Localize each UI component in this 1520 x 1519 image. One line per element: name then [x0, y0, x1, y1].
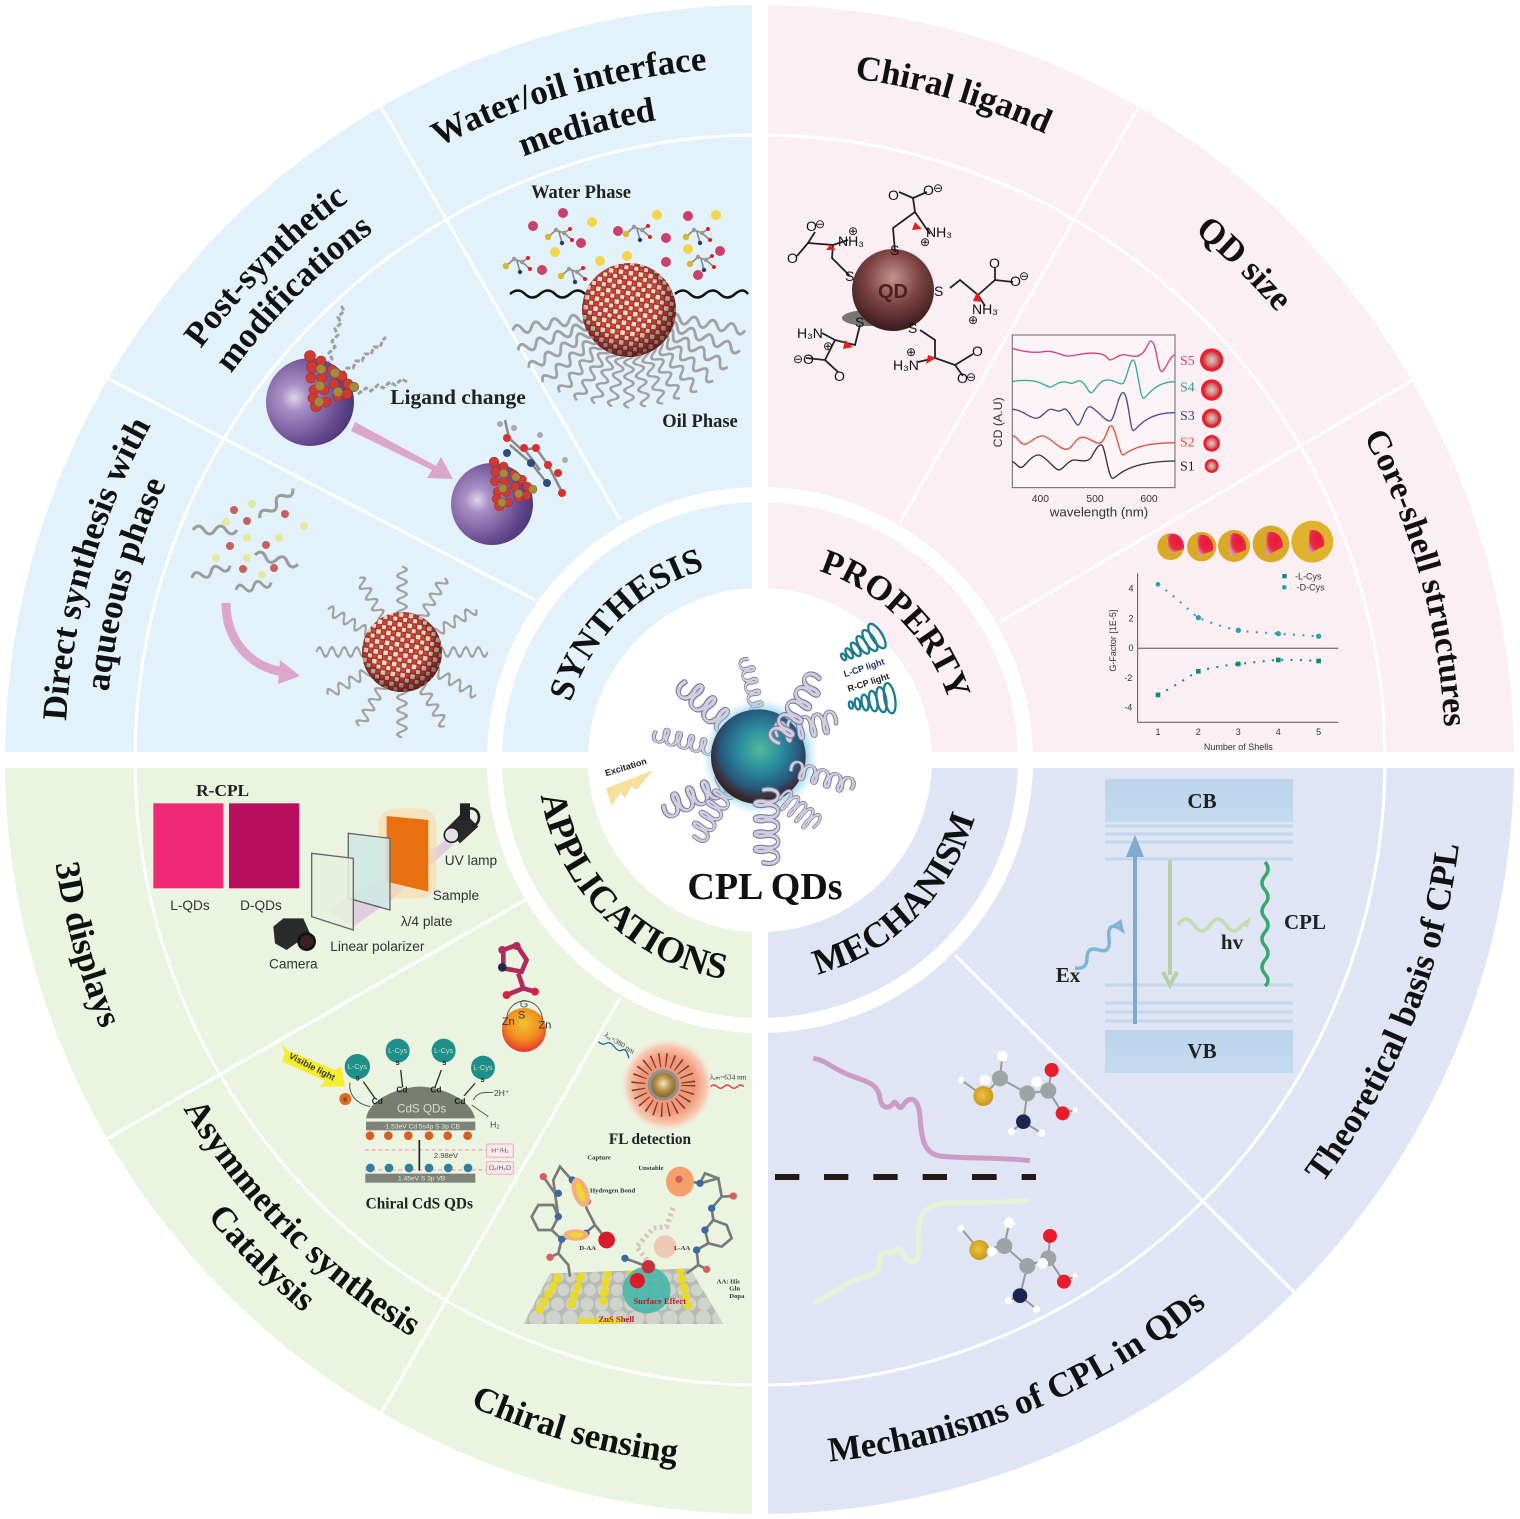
sample labels: Linear polarizer	[330, 939, 425, 954]
figure: ligand change	[266, 305, 568, 545]
ligand labels: H₃N	[893, 357, 919, 373]
ligand labels: ⊕	[968, 313, 978, 327]
ligand labels: NH₃	[926, 224, 952, 240]
series labels	[1180, 354, 1195, 475]
label: oil phase: Oil Phase	[662, 412, 738, 432]
cysteine molecule lower	[958, 1217, 1078, 1313]
title: CPL QDs: CPL QDs	[687, 866, 843, 908]
excitation wave	[598, 1042, 629, 1058]
emission label: λₑₘ=634 nm	[710, 1072, 747, 1081]
purple QD after	[451, 463, 533, 545]
tick labels: 3	[1236, 727, 1241, 737]
ligand labels: ⊕	[906, 345, 916, 359]
heading: core-shell structures: Core-shell structures	[1368, 431, 1460, 726]
band labels: hv	[1221, 930, 1244, 954]
surface atoms after	[489, 457, 537, 511]
curve S2	[1012, 426, 1175, 455]
light labels: L-CP light	[842, 657, 886, 679]
figure: CPL mechanism	[775, 1051, 1078, 1313]
excitation label: Excitation	[604, 756, 648, 778]
axis labels: 600	[1140, 494, 1158, 505]
series labels: S2	[1180, 436, 1195, 451]
ligand labels: O	[989, 255, 1000, 271]
curve S3	[1012, 393, 1175, 431]
tick labels: G-Factor [1E-5]	[1108, 610, 1118, 672]
R-CP light cone	[846, 682, 898, 720]
panel: synthesis	[43, 51, 749, 738]
arrow: ligand change	[351, 422, 453, 479]
band labels: VB	[1187, 1039, 1217, 1063]
visible light arrow	[282, 1045, 345, 1087]
series labels: S3	[1180, 409, 1195, 424]
sensing labels: AA: His	[717, 1278, 740, 1285]
redox levels: O₂/H₂O	[489, 1165, 511, 1172]
ligand labels: NH₃	[972, 301, 998, 317]
L-Cys groups: S	[396, 1061, 400, 1067]
substrate molecule	[498, 942, 539, 999]
heading: 3D displays: 3D displays	[56, 862, 115, 1028]
tick labels: 2	[1196, 727, 1201, 737]
sphere glow	[702, 698, 818, 815]
Zn-S labels	[502, 998, 551, 1031]
tick labels: -4	[1124, 703, 1132, 713]
L-Cys series	[1156, 574, 1321, 697]
sample labels: UV lamp	[445, 853, 498, 868]
heading: MECHANISM: MECHANISM	[810, 811, 975, 975]
helices behind	[653, 657, 765, 843]
conduction band bar: -1.53eV Cd 5s4p S 3p CB	[383, 1123, 461, 1130]
label: water phase: Water Phase	[531, 183, 631, 203]
label: ligand change: Ligand change	[390, 385, 526, 409]
pink spectrum curve	[813, 1058, 1030, 1161]
CdS dome	[366, 1087, 475, 1118]
sample labels: D-QDs	[240, 898, 282, 913]
excitation label: λₑₓ=380 nm	[603, 1030, 637, 1056]
sensing labels: D-AA	[579, 1245, 596, 1252]
tick labels: 1	[1155, 727, 1160, 737]
L-Cys groups: L-Cys	[348, 1062, 367, 1071]
axis labels: 500	[1086, 494, 1104, 505]
sensing labels: Surface Effect	[633, 1296, 686, 1306]
curve S1	[1012, 445, 1175, 478]
ligand labels: O	[803, 351, 814, 367]
sample labels	[170, 853, 498, 971]
excitation arrow	[1126, 835, 1144, 1024]
ligand labels: NH₃	[838, 233, 864, 249]
heading: asymmetric synthesis: Asymmetric synthesis	[183, 1105, 418, 1335]
panel: property	[787, 57, 1460, 752]
axis labels: CD (A.U)	[991, 397, 1005, 447]
camera	[273, 918, 315, 950]
dashed divider	[775, 1168, 1036, 1186]
ligand labels: ⊖	[793, 352, 803, 366]
linear polarizer	[312, 853, 353, 930]
emission wave	[711, 1085, 744, 1088]
QD sphere	[711, 709, 806, 804]
series labels: S5	[1180, 354, 1195, 369]
tick labels: 5	[1316, 727, 1321, 737]
ligand labels: ⊖	[815, 217, 825, 231]
heading: QD size: QD size	[1200, 219, 1287, 311]
core-shell spheres	[1157, 521, 1333, 563]
CdS dome label: CdS QDs	[397, 1102, 446, 1115]
sensing labels: Unstable	[638, 1165, 664, 1172]
L-Cys groups: S	[481, 1078, 485, 1084]
axes	[1138, 573, 1338, 722]
ligand labels: O	[972, 343, 983, 359]
ligand labels: H₃N	[797, 325, 823, 341]
CB band	[1105, 779, 1293, 822]
redox levels: 2.98eV	[434, 1151, 459, 1160]
band labels: CPL	[1284, 910, 1326, 934]
heading: direct synthesis with: Direct synthesis with	[43, 420, 151, 720]
QD sphere shadow	[842, 310, 894, 326]
new ligands	[497, 420, 568, 497]
valence band bar: 1.45eV S 3p VB	[398, 1175, 446, 1182]
L-Cys groups: S	[442, 1061, 446, 1067]
size spheres	[1200, 348, 1223, 473]
precursor dots and chains	[191, 486, 308, 594]
label: chiral CdS QDs: Chiral CdS QDs	[366, 1195, 473, 1212]
tick labels: 2	[1128, 614, 1133, 624]
sensing labels	[579, 1154, 745, 1324]
heading line: catalysis: Catalysis	[212, 1207, 312, 1310]
ligand labels: S	[855, 314, 864, 330]
sensing labels: Capture	[587, 1154, 611, 1161]
radial ligands	[316, 566, 488, 738]
ZnS surface atoms	[524, 1268, 724, 1324]
tick labels: -L-Cys	[1295, 571, 1322, 581]
ligand labels: ⊖	[1019, 269, 1029, 283]
band labels: Ex	[1056, 963, 1081, 987]
sensing labels: ZnS Shell	[598, 1314, 635, 1324]
L-Cys groups: L-Cys	[473, 1063, 493, 1072]
center: CPL QDs	[604, 621, 898, 908]
panel: applications	[56, 781, 747, 1470]
heading line: mediated: mediated	[518, 96, 656, 156]
sample labels: L-QDs	[170, 898, 210, 913]
heading line: modifications: modifications	[218, 220, 372, 373]
electron path: H₂	[490, 1119, 500, 1129]
tick labels: -2	[1124, 673, 1132, 683]
relaxation arrow	[1163, 860, 1177, 985]
curve S4	[1012, 360, 1175, 398]
ligand labels: ⊕	[848, 224, 858, 238]
tick labels: -D-Cys	[1297, 583, 1325, 593]
beam	[327, 837, 453, 927]
ligand labels: ⊖	[966, 370, 976, 384]
ligand bonds	[797, 192, 1013, 376]
figure: water oil interface	[503, 183, 748, 432]
label: FL detection: FL detection	[609, 1131, 692, 1148]
QD halo	[621, 1039, 713, 1131]
figure: band diagram	[1056, 779, 1326, 1073]
UV lamp	[444, 803, 479, 843]
sample labels: Sample	[433, 888, 479, 903]
cysteine molecule upper	[958, 1051, 1078, 1137]
purple QD before	[266, 358, 354, 446]
heading: mechanisms of CPL in QDs: Mechanisms of CPL in QDs	[827, 1294, 1204, 1462]
holes	[366, 1164, 472, 1172]
axis labels	[991, 397, 1158, 520]
electrons	[366, 1131, 472, 1140]
right L-AA molecule	[666, 1167, 737, 1273]
heading: chiral ligand: Chiral ligand	[858, 57, 1054, 134]
D-QDs photo	[229, 803, 299, 888]
light labels: R-CP light	[846, 671, 890, 694]
axis labels: 400	[1032, 494, 1049, 505]
series labels: S1	[1180, 460, 1195, 475]
ligand labels: O	[1010, 273, 1021, 289]
light labels	[842, 657, 890, 694]
ligand labels: S	[908, 320, 917, 336]
left D-AA molecule	[532, 1167, 615, 1277]
redox levels	[365, 1140, 513, 1174]
ligand labels: S	[934, 283, 943, 299]
ligand shell	[638, 1060, 688, 1110]
CPL wave	[1262, 862, 1268, 986]
tick labels: Number of Shells	[1204, 742, 1273, 752]
ligand labels: ⊖	[933, 181, 943, 195]
figure: chiral sensing on ZnS	[520, 1154, 745, 1324]
conduction band bar	[366, 1122, 475, 1130]
L-Cys groups: Cd	[454, 1096, 466, 1106]
heading: post-synthetic: Post-synthetic	[182, 189, 348, 348]
chiral wedges	[826, 222, 982, 364]
sensing labels: Gln	[729, 1286, 740, 1293]
ligand labels	[787, 181, 1029, 386]
L-Cys groups: S	[356, 1077, 360, 1083]
D-Cys series	[1156, 582, 1321, 639]
oil chains	[512, 313, 746, 408]
helices front	[755, 671, 855, 863]
sensing labels: Dopa	[729, 1293, 745, 1300]
ligand labels: O	[957, 370, 968, 386]
orange sample	[387, 816, 428, 892]
figure: chiral ligand QD	[787, 181, 1029, 386]
QD core	[649, 1071, 677, 1099]
curve S5	[1012, 341, 1175, 372]
Zn-S labels: Zn	[502, 1016, 515, 1028]
heading: APPLICATIONS: APPLICATIONS	[540, 796, 726, 978]
ligand labels: O	[888, 187, 899, 203]
L-Cys groups: L-Cys	[434, 1046, 454, 1055]
L-Cys groups: L-Cys	[388, 1046, 408, 1055]
panel: mechanism	[775, 779, 1459, 1462]
Ex wave arrow	[1075, 922, 1122, 968]
checkered QD sphere	[362, 612, 442, 692]
sphere text: QD	[878, 281, 908, 303]
ligand labels: O	[834, 368, 845, 384]
pale spectrum curve	[813, 1200, 1030, 1302]
band labels: CB	[1187, 789, 1217, 813]
checkered QD sphere	[582, 263, 676, 357]
hv wave arrow	[1178, 919, 1248, 931]
ligand labels: ⊕	[920, 235, 930, 249]
sample labels: Camera	[269, 956, 318, 971]
label: R-CPL: R-CPL	[196, 781, 249, 800]
Zn-S labels: Zn	[539, 1019, 551, 1031]
band labels	[1056, 789, 1326, 1063]
heading: SYNTHESIS: SYNTHESIS	[551, 549, 702, 700]
ligand labels: O	[787, 250, 798, 266]
alkyl ligands	[326, 305, 407, 394]
figure: direct aqueous synthesis	[191, 486, 488, 738]
sensing labels: L-AA	[674, 1245, 690, 1252]
ligand labels: S	[890, 242, 899, 258]
figure: 3D displays setup	[153, 781, 498, 971]
sample glow	[378, 808, 437, 898]
tick labels	[1108, 571, 1325, 752]
axis labels: wavelength (nm)	[1049, 505, 1148, 520]
heading: chiral sensing: Chiral sensing	[474, 1388, 678, 1470]
tick labels: 4	[1276, 727, 1281, 737]
ligand labels: ⊕	[823, 339, 833, 353]
sensing labels: Hydrogen Bond	[590, 1187, 635, 1194]
tick labels: 4	[1128, 584, 1133, 594]
sample labels: λ/4 plate	[401, 914, 452, 929]
electron path: e	[343, 1095, 347, 1104]
figure: FL detection	[598, 1030, 747, 1148]
heading: PROPERTY: PROPERTY	[820, 550, 970, 696]
tick labels: 0	[1128, 643, 1133, 653]
arrow: curved reaction	[226, 603, 300, 684]
binding arcs	[507, 1001, 543, 1020]
ligand labels: O	[806, 218, 817, 234]
water phase dots	[503, 208, 725, 284]
visible light arrow: Visible light	[287, 1051, 337, 1083]
valence band bar	[365, 1174, 475, 1183]
electron path: 2H⁺	[494, 1088, 510, 1098]
L-Cys groups: Cd	[430, 1085, 442, 1095]
redox levels: H⁺/H₂	[491, 1148, 509, 1155]
ZnS sphere	[502, 1008, 546, 1052]
Zn-S labels: G	[520, 998, 528, 1010]
chart frame	[1012, 335, 1175, 488]
faded central molecule	[621, 1207, 676, 1313]
core-shell g-factor chart	[1108, 521, 1338, 752]
L-QDs photo	[153, 803, 223, 888]
CD spectra chart	[991, 335, 1223, 520]
heading line: aqueous phase: aqueous phase	[93, 480, 165, 690]
heading: theoretical basis of CPL: Theoretical basis of CPL	[1304, 845, 1459, 1180]
ligand labels: O	[923, 182, 934, 198]
Zn-S labels: S	[518, 1009, 525, 1021]
L-Cys groups	[345, 1039, 495, 1106]
L-Cys groups: Cd	[372, 1096, 383, 1106]
heading: water/oil interface: Water/oil interface	[429, 51, 706, 143]
figure: asymmetric catalysis	[282, 942, 551, 1212]
series labels: S4	[1180, 381, 1195, 396]
QD sphere	[852, 249, 934, 331]
quarter wave plate	[348, 833, 390, 910]
interface line	[510, 290, 748, 298]
L-CP light cone	[834, 621, 889, 670]
VB band	[1105, 1030, 1293, 1073]
ligand labels: S	[845, 268, 854, 284]
excitation bolt	[606, 770, 653, 806]
L-Cys groups: Cd	[396, 1085, 408, 1095]
electron path	[339, 1083, 510, 1129]
surface atoms before	[304, 350, 359, 412]
